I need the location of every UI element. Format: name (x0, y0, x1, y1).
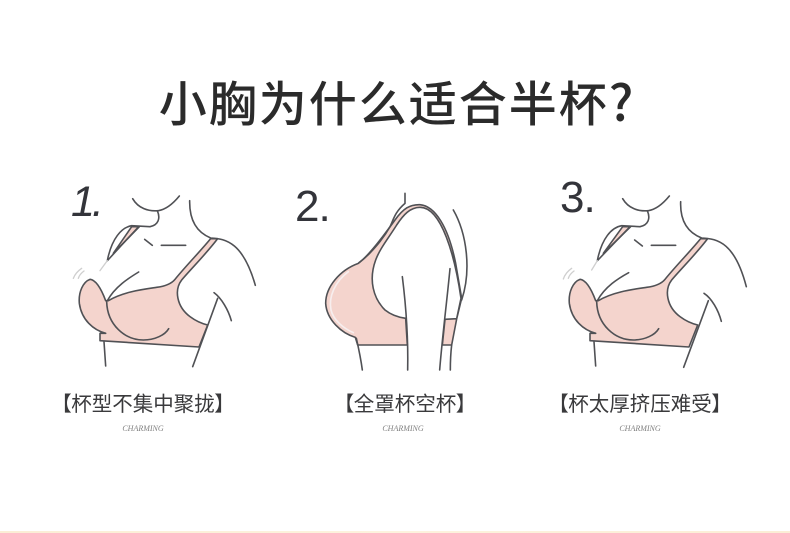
illustration 3: bra front view (563, 196, 746, 367)
caption 1: CHARMING (122, 424, 164, 433)
label 1: 【杯型不集中聚拢】 (51, 393, 235, 416)
illustration 1: bra front view (73, 196, 255, 367)
number 3: 3. (560, 173, 595, 222)
label 3: 【杯太厚挤压难受】 (548, 393, 732, 416)
label 2: 【全罩杯空杯】 (334, 393, 476, 416)
number 2: 2. (295, 182, 330, 231)
number 1: 1. (71, 178, 101, 226)
caption 2: CHARMING (382, 424, 424, 433)
illustration 2: bra side view (326, 193, 467, 370)
caption 3: CHARMING (619, 424, 661, 433)
footer strip (0, 531, 790, 533)
title: 小胸为什么适合半杯? (159, 64, 635, 136)
